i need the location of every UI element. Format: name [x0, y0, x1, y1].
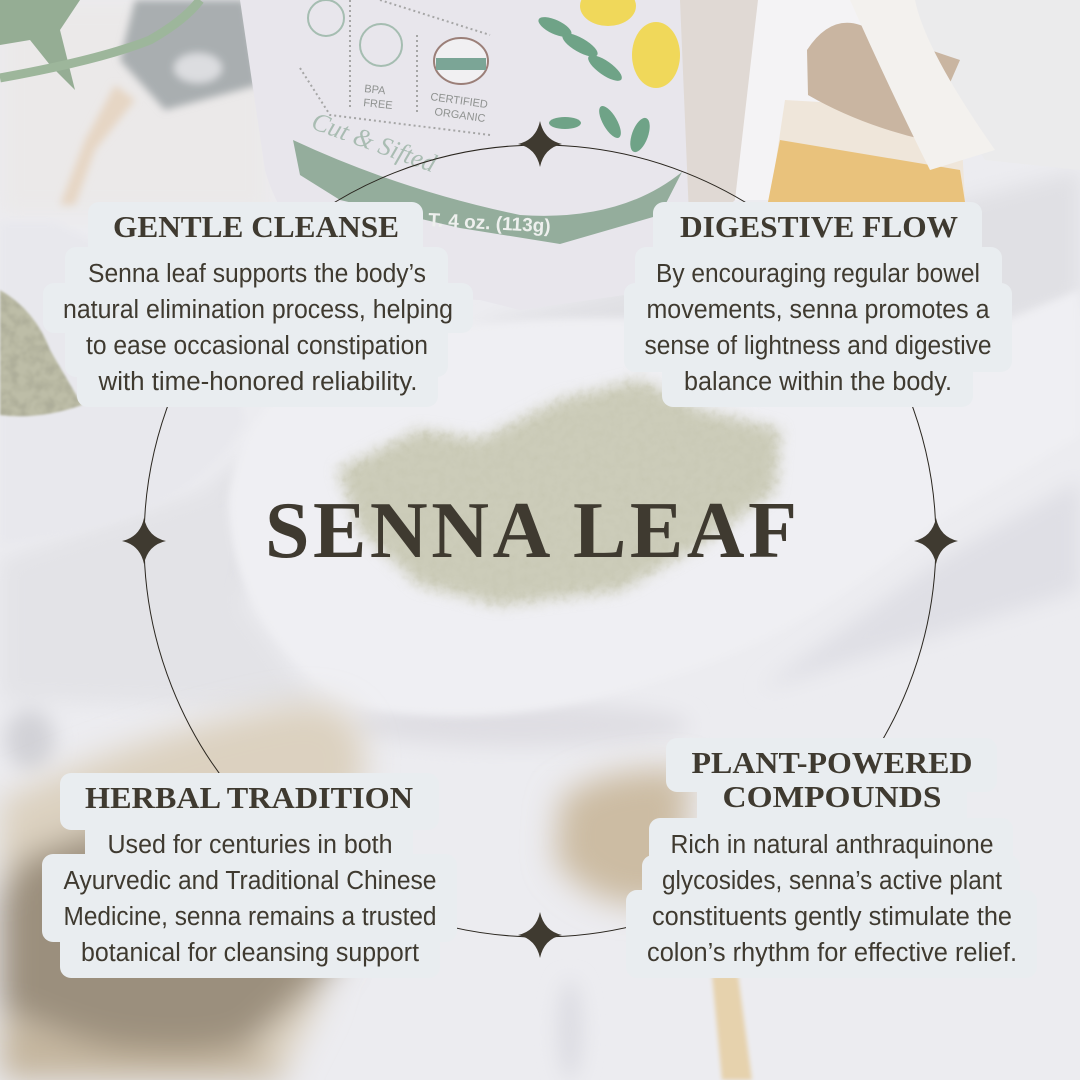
main title: SENNA LEAF — [265, 487, 797, 575]
blurred spoon and powder — [228, 290, 1080, 716]
pouch: CERTIFIED — [430, 91, 489, 111]
body text: constituents gently stimulate the — [652, 903, 1012, 931]
body text: Medicine, senna remains a trusted — [64, 903, 436, 931]
body text: glycosides, senna’s active plant — [662, 867, 1002, 895]
star: right — [914, 518, 958, 564]
body text: movements, senna promotes a — [646, 296, 990, 324]
body text: By encouraging regular bowel — [656, 260, 980, 288]
panel: herbal tradition — [42, 773, 457, 978]
pouch: ORGANIC — [434, 106, 486, 125]
heading: PLANT-POWERED — [692, 745, 972, 780]
organic seal — [434, 38, 488, 84]
blurred foreground bowl and spoon — [0, 704, 690, 1080]
panel: plant-powered compounds: COMPOUNDS — [722, 779, 942, 814]
body text: Used for centuries in both — [108, 831, 392, 859]
heading: HERBAL TRADITION — [85, 780, 413, 815]
heading: GENTLE CLEANSE — [113, 209, 399, 244]
star: bottom — [518, 912, 562, 958]
body text: colon’s rhythm for effective relief. — [647, 939, 1017, 967]
body text — [63, 260, 453, 396]
body text — [647, 831, 1017, 967]
body text: sense of lightness and digestive — [644, 332, 992, 360]
pouch: BPA — [364, 83, 387, 97]
body text: Senna leaf supports the body’s — [88, 260, 426, 288]
body text: balance within the body. — [684, 368, 952, 396]
plant sprig — [0, 0, 200, 90]
ring connector — [144, 145, 936, 937]
pouch: FREE — [363, 97, 393, 112]
panel: plant-powered compounds — [626, 738, 1037, 978]
panel: digestive flow — [624, 202, 1012, 407]
honey jar — [768, 0, 1080, 202]
body text: natural elimination process, helping — [63, 296, 453, 324]
body text — [64, 831, 436, 967]
body text — [644, 260, 992, 396]
wooden stick — [712, 975, 752, 1080]
free-from badges — [360, 24, 402, 66]
pouch: Cut & Sifted — [308, 106, 441, 178]
white bowl left — [0, 222, 245, 545]
body text: to ease occasional constipation — [86, 332, 428, 360]
body text: Ayurvedic and Traditional Chinese — [64, 867, 436, 895]
pouch — [240, 0, 880, 310]
body text: botanical for cleansing support — [81, 939, 419, 967]
star: left — [122, 518, 166, 564]
body text: with time-honored reliability. — [97, 368, 417, 396]
top-left dark object — [60, 0, 258, 205]
star: top — [518, 121, 562, 167]
body text: Rich in natural anthraquinone — [670, 831, 994, 859]
pouch: T. 4 oz. (113g) — [428, 210, 551, 237]
flowers and leaves — [580, 0, 680, 88]
panel: gentle cleanse — [43, 202, 473, 407]
heading: DIGESTIVE FLOW — [680, 209, 958, 244]
